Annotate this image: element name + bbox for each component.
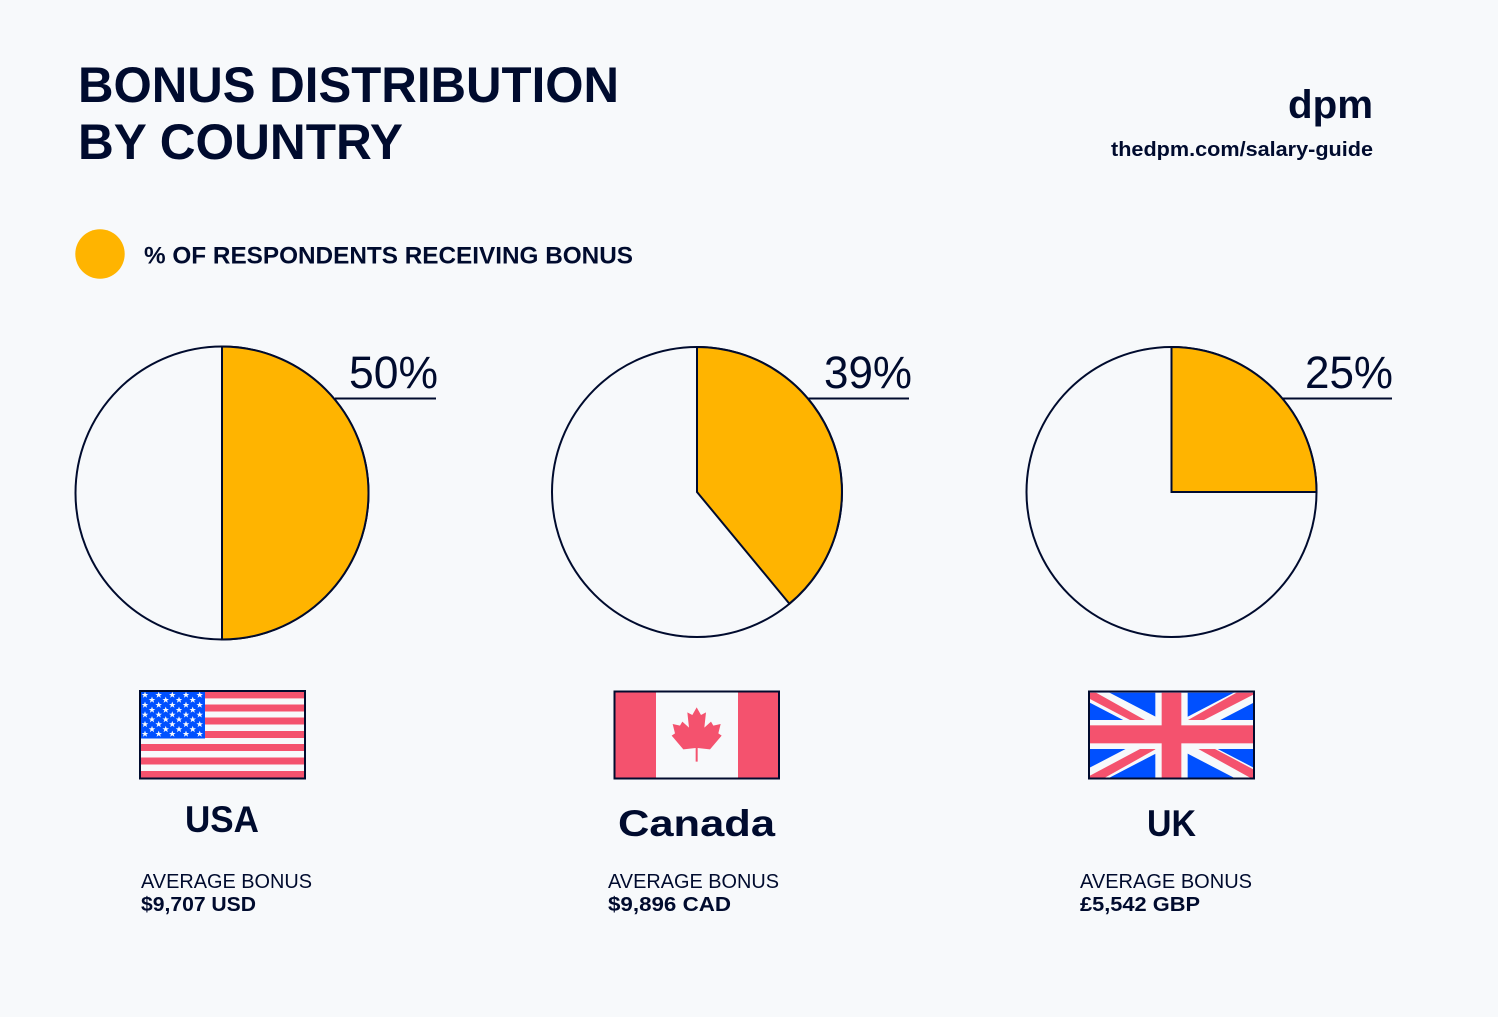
- average bonus: UK: AVERAGE BONUS: [1080, 870, 1252, 893]
- panel: USA: [76, 346, 438, 916]
- panel: Canada: [552, 347, 912, 916]
- callout: 25%: 25%: [1305, 347, 1393, 398]
- pie chart: Canada 39%: [552, 347, 842, 637]
- logo and url: dpm: [1288, 83, 1373, 127]
- country name: UK: UK: [1147, 803, 1196, 844]
- average bonus: USA: AVERAGE BONUS: [141, 870, 312, 893]
- average bonus: USA: [141, 870, 312, 916]
- icon: US flag: [140, 691, 305, 778]
- callout: 39%: 39%: [824, 347, 912, 398]
- logo and url: [1111, 83, 1373, 161]
- panel: UK: [1026, 347, 1393, 916]
- pie chart: USA 50%: [76, 346, 368, 640]
- average bonus: Canada: $9,896 CAD: [608, 893, 731, 916]
- icon: UK flag: [1089, 692, 1254, 778]
- title: BY COUNTRY: [78, 114, 403, 170]
- average bonus: Canada: AVERAGE BONUS: [608, 870, 779, 893]
- pie chart: UK 25%: [1026, 347, 1316, 637]
- legend: % OF RESPONDENTS RECEIVING BONUS: [144, 242, 633, 270]
- country name: Canada: Canada: [618, 803, 775, 844]
- average bonus: Canada: [608, 870, 779, 916]
- legend: [75, 229, 633, 279]
- title: [78, 57, 619, 170]
- title: BONUS DISTRIBUTION: [78, 57, 619, 113]
- average bonus: UK: [1080, 870, 1252, 916]
- callout: 50%: 50%: [349, 347, 438, 398]
- country name: USA: USA: [185, 799, 259, 840]
- average bonus: USA: $9,707 USD: [141, 893, 256, 916]
- average bonus: UK: £5,542 GBP: [1080, 893, 1200, 916]
- icon: Canadian flag: [614, 692, 779, 778]
- logo and url: thedpm.com/salary-guide: [1111, 138, 1373, 161]
